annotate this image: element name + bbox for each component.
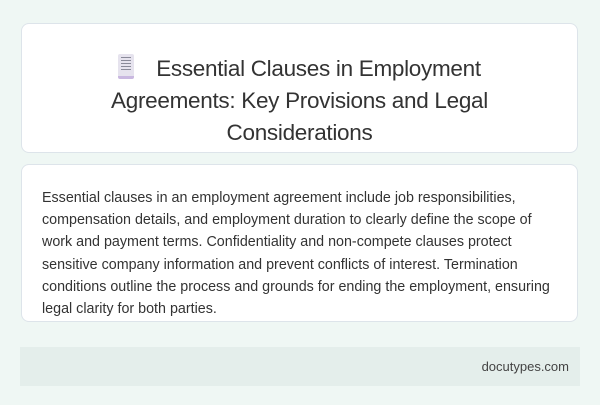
footer text: docutypes.com: [482, 359, 569, 374]
footer bar: [20, 347, 580, 386]
text block: description: compensation details, and employment duration to clearly define the scope of: [42, 212, 532, 228]
text block: description: legal clarity for both parties.: [42, 301, 217, 317]
text block: description: Essential clauses in an employment agreement include job responsibilities,: [42, 190, 516, 206]
title: Essential Clauses in Employment Agreements: Key Provisions and Legal Considerations: [111, 56, 488, 145]
panel: title card: [21, 23, 578, 153]
text block: description: [42, 190, 550, 317]
text block: description: work and payment terms. Confidentiality and non-compete clauses protect: [42, 234, 512, 250]
icon: document scroll: [118, 54, 134, 79]
panel: description card: [21, 164, 578, 322]
text block: description: sensitive company information and prevent conflicts of interest. Termination: [42, 257, 518, 273]
text block: description: conditions outline the process and grounds for ending the employment, ensuring: [42, 279, 550, 295]
